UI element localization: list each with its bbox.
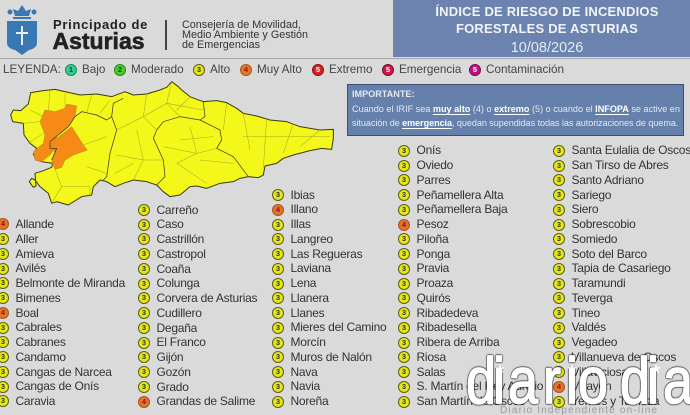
list column 3: Laviana: [290, 261, 331, 275]
list column 5: [553, 143, 690, 408]
list column 4: San Martín de Oscos: [416, 394, 525, 408]
list column 1: Cangas de Narcea: [16, 364, 112, 378]
list column 2: Coaña: [156, 262, 191, 276]
legend: 2: [118, 65, 122, 74]
legend: Alto: [193, 63, 230, 76]
list column 1: Caravia: [16, 394, 55, 408]
text: 3: [557, 146, 561, 155]
list column 1: Cangas de Onís: [16, 379, 99, 393]
list column 2: Castrillón: [156, 232, 204, 246]
title: [435, 4, 659, 36]
list column 2: Gozón: [156, 365, 191, 379]
callout: important notice: [347, 84, 684, 136]
list column 4: Peñamellera Alta: [416, 188, 503, 202]
list column 1: Boal: [16, 306, 39, 320]
list column 4: Piloña: [416, 232, 448, 246]
list column 3: Nava: [290, 365, 318, 379]
title: ÍNDICE DE RIESGO DE INCENDIOS: [435, 4, 659, 19]
legend: LEYENDA:: [3, 63, 61, 76]
list column 5: Santa Eulalia de Oscos: [572, 143, 690, 157]
legend: 3: [197, 65, 201, 74]
watermark: diario dia: diario: [466, 344, 608, 415]
list column 5: Teverga: [572, 291, 613, 305]
list column 5: Siero: [572, 202, 598, 216]
text: 3: [276, 397, 280, 406]
legend: Muy Alto: Muy Alto: [257, 63, 302, 76]
text: 4: [402, 220, 406, 229]
text: 3: [276, 279, 280, 288]
list column 5: Taramundi: [572, 276, 625, 290]
title panel: [393, 0, 690, 57]
text: 3: [402, 264, 406, 273]
list column 4: Pesoz: [416, 217, 449, 231]
list column 3: Llanes: [290, 306, 324, 320]
text: 3: [557, 279, 561, 288]
text: 3: [1, 278, 5, 287]
text: 3: [276, 264, 280, 273]
list column 2: Colunga: [156, 276, 200, 290]
legend: Emergencia: Emergencia: [399, 63, 461, 76]
list column 5: Santo Adriano: [572, 173, 644, 187]
text: 3: [557, 205, 561, 214]
list column 4: Oviedo: [416, 158, 453, 172]
text: 3: [1, 264, 5, 273]
text: 3: [402, 249, 406, 258]
text: 3: [276, 234, 280, 243]
list column 4: Pravia: [416, 261, 449, 275]
legend: [3, 63, 564, 76]
icon: shield of Asturias: [7, 5, 37, 55]
list column 2: Degaña: [156, 320, 197, 334]
list column 3: Lena: [290, 276, 316, 290]
text: 3: [402, 323, 406, 332]
list column 4: Salas: [416, 365, 445, 379]
legend: Alto: Alto: [210, 63, 230, 76]
text: 3: [1, 234, 5, 243]
list column 1: [0, 217, 126, 408]
list column 4: S. Martín del Rey Aurelio: [416, 379, 543, 393]
text: 3: [1, 396, 5, 405]
list column 3: Las Regueras: [290, 247, 362, 261]
map of Asturias: [10, 81, 334, 206]
list column 5: Villaviciosa: [572, 365, 628, 379]
list column 3: Langreo: [290, 232, 333, 246]
text: 3: [142, 279, 146, 288]
text: 3: [557, 234, 561, 243]
text: 3: [557, 308, 561, 317]
text: 3: [402, 205, 406, 214]
list column 1: Bimenes: [16, 291, 61, 305]
text: 3: [557, 338, 561, 347]
list column 4: Ribadedeva: [416, 306, 478, 320]
list column 2: Corvera de Asturias: [156, 291, 257, 305]
list column 1: Aller: [16, 232, 38, 246]
title: FORESTALES DE ASTURIAS: [456, 21, 638, 36]
list column 4: Peñamellera Baja: [416, 202, 507, 216]
list column 4: Ribadesella: [416, 320, 477, 334]
department text: Medio Ambiente y Gestión: [182, 29, 308, 41]
list column 2: Carreño: [156, 202, 198, 216]
text: 3: [402, 190, 406, 199]
list column 1: Cabrales: [16, 320, 62, 334]
list column 5: San Tirso de Abres: [572, 158, 669, 172]
legend: Extremo: Extremo: [329, 63, 373, 76]
list column 5: Villayón: [572, 379, 611, 393]
text: 3: [557, 161, 561, 170]
list column 5: Sariego: [572, 188, 611, 202]
list column 1: Cabranes: [16, 335, 66, 349]
legend: 5: [316, 65, 320, 74]
text: 3: [276, 220, 280, 229]
text: 3: [402, 234, 406, 243]
list column 2: Castropol: [156, 247, 206, 261]
watermark: diario dia: [466, 344, 690, 415]
text: 3: [557, 352, 561, 361]
text: 3: [142, 382, 146, 391]
text: 3: [402, 279, 406, 288]
list column 2: [138, 202, 258, 408]
text: 3: [1, 293, 5, 302]
text: 3: [557, 249, 561, 258]
text: 3: [276, 249, 280, 258]
text: 3: [276, 308, 280, 317]
text: 3: [402, 352, 406, 361]
text: 4: [1, 219, 5, 228]
text: 3: [142, 220, 146, 229]
text: 3: [1, 337, 5, 346]
text: 3: [142, 205, 146, 214]
list column 2: El Franco: [156, 335, 206, 349]
list column 4: Ribera de Arriba: [416, 335, 499, 349]
text: 3: [142, 367, 146, 376]
text: 3: [1, 323, 5, 332]
legend: 5: [473, 65, 477, 74]
watermark: diario dia: ★: [650, 362, 662, 377]
list column 3: Muros de Nalón: [290, 350, 372, 364]
region: yellow councils: [11, 82, 333, 205]
text: 3: [142, 249, 146, 258]
list column 4: Proaza: [416, 276, 453, 290]
text: 3: [276, 338, 280, 347]
text: 3: [557, 190, 561, 199]
text: 3: [557, 264, 561, 273]
text: 3: [142, 234, 146, 243]
list column 3: Navia: [290, 379, 320, 393]
callout: important notice: Cuando el IRIF sea muy alto (4) o extremo (5) o cuando el INFOPA se active en: [352, 104, 680, 114]
text: 3: [142, 308, 146, 317]
text: 3: [276, 352, 280, 361]
list column 4: Ponga: [416, 247, 450, 261]
text: 3: [557, 367, 561, 376]
text: 3: [276, 382, 280, 391]
list column 2: Gijón: [156, 350, 183, 364]
list column 5: Somiedo: [572, 232, 617, 246]
text: 3: [402, 293, 406, 302]
list column 1: Avilés: [16, 261, 46, 275]
text: 3: [402, 397, 406, 406]
list column 3: Illano: [290, 202, 318, 216]
text: 3: [557, 175, 561, 184]
watermark: diario dia: ★: [566, 362, 578, 377]
text: 3: [142, 293, 146, 302]
text: 3: [557, 220, 561, 229]
text: 3: [1, 382, 5, 391]
legend: 5: [386, 65, 390, 74]
text: 3: [142, 323, 146, 332]
list column 3: Mieres del Camino: [290, 320, 386, 334]
legend: Moderado: Moderado: [131, 63, 184, 76]
department text: de Emergencias: [182, 39, 260, 51]
region: orange councils: [33, 104, 87, 169]
list column 1: Allande: [16, 217, 54, 231]
text: 4: [557, 382, 561, 391]
list column 1: Belmonte de Miranda: [16, 276, 125, 290]
text: 4: [276, 205, 280, 214]
text: 3: [276, 293, 280, 302]
list column 5: Vegadeo: [572, 335, 617, 349]
text: 3: [557, 293, 561, 302]
list column 5: Tapia de Casariego: [572, 261, 671, 275]
list column 4: Parres: [416, 173, 450, 187]
callout: important notice: situación de emergencia, quedan supendidas todas las autorizaciones de quema.: [352, 118, 678, 128]
text: 3: [402, 308, 406, 317]
list column 4: Quirós: [416, 291, 450, 305]
logo text: Principado de: [53, 17, 148, 32]
list column 2: Grandas de Salime: [156, 394, 255, 408]
list column 4: [398, 143, 543, 408]
department text: [182, 19, 308, 51]
list column 5: Sobrescobio: [572, 217, 636, 231]
text: 3: [1, 352, 5, 361]
legend: Contaminación: Contaminación: [486, 63, 564, 76]
legend: Bajo: Bajo: [82, 63, 105, 76]
text: 4: [142, 397, 146, 406]
internal boundaries: [50, 98, 248, 185]
list column 2: Grado: [156, 380, 189, 394]
list column 3: Llanera: [290, 291, 329, 305]
text: 3: [142, 352, 146, 361]
list column 1: Amieva: [16, 246, 54, 260]
list column 3: Illas: [290, 217, 311, 231]
text: 3: [142, 338, 146, 347]
text: 3: [1, 249, 5, 258]
list column 5: Soto del Barco: [572, 247, 647, 261]
text: 3: [1, 367, 5, 376]
text: 3: [142, 264, 146, 273]
text: 3: [402, 175, 406, 184]
list column 5: Villanueva de Oscos: [572, 350, 676, 364]
callout: important notice: IMPORTANTE:: [352, 89, 414, 99]
list column 3: Ibias: [290, 188, 315, 202]
watermark: diario dia: ★: [494, 362, 506, 377]
list column 5: Tineo: [572, 306, 600, 320]
logo: Principado de Asturias: [7, 5, 308, 55]
logo: Principado de Asturias: Asturias: [52, 28, 145, 54]
list column 2: Cudillero: [156, 306, 202, 320]
list column 4: Riosa: [416, 350, 446, 364]
legend: Bajo: [65, 63, 105, 76]
list column 2: Caso: [156, 217, 184, 231]
text: 3: [557, 397, 561, 406]
legend: 1: [69, 65, 73, 74]
text: 3: [276, 190, 280, 199]
text: 3: [402, 161, 406, 170]
date: 10/08/2026: [511, 40, 583, 56]
legend: 4: [244, 65, 248, 74]
text: 3: [276, 323, 280, 332]
list column 4: Onís: [416, 143, 441, 157]
list column 5: Valdés: [572, 320, 606, 334]
list column 1: Candamo: [16, 350, 66, 364]
list column 3: Morcín: [290, 335, 326, 349]
text: 3: [276, 367, 280, 376]
text: 3: [402, 146, 406, 155]
department text: Consejería de Movilidad,: [182, 19, 301, 31]
text: 3: [402, 338, 406, 347]
text: 4: [1, 308, 5, 317]
list column 3: Noreña: [290, 394, 328, 408]
text: 3: [402, 382, 406, 391]
list column 3: [272, 188, 386, 408]
text: 3: [557, 323, 561, 332]
text: 3: [402, 367, 406, 376]
list column 5: Yernes y Tameza: [572, 394, 659, 408]
